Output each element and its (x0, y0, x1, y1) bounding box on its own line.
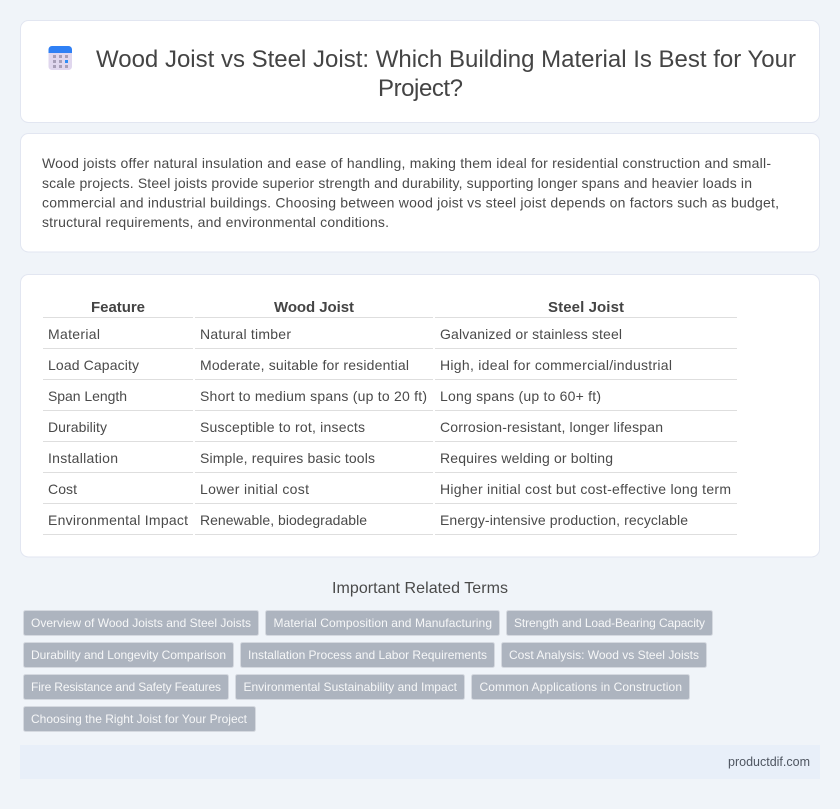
tag: Strength and Load-Bearing Capacity (514, 616, 705, 630)
table header row: Wood Joist (274, 299, 354, 316)
table row: material: Material (48, 326, 100, 342)
table row: installation: Simple, requires basic tools (200, 450, 375, 466)
comparison table (43, 299, 737, 534)
tag (24, 610, 258, 636)
tag: Overview of Wood Joists and Steel Joists (31, 616, 251, 630)
text block: description: commercial and industrial buildings. Choosing between wood joist vs steel joist depends on factors such as budget, (42, 194, 779, 210)
table row: material: Galvanized or stainless steel (440, 326, 622, 342)
text block: description: Wood joists offer natural insulation and ease of handling, making them ideal for residential construction and small- (42, 155, 771, 171)
tag (266, 610, 500, 636)
text block: description: structural requirements, and environmental conditions. (42, 214, 389, 230)
table header row: Feature (91, 299, 145, 316)
tag: Fire Resistance and Safety Features (31, 680, 221, 694)
table row: environmental impact: Energy-intensive production, recyclable (440, 512, 688, 528)
table row: environmental impact: Renewable, biodegradable (200, 512, 367, 528)
table row: installation: Installation (48, 450, 118, 466)
tag: Cost Analysis: Wood vs Steel Joists (509, 648, 699, 662)
table row: cost (48, 481, 731, 497)
table row: span length: Long spans (up to 60+ ft) (440, 388, 601, 404)
table row: span length (48, 388, 601, 404)
footer bar (20, 745, 820, 779)
text block: description: scale projects. Steel joists provide superior strength and durability, supporting longer spans and heavier loads in (42, 175, 752, 191)
table row: load capacity: Load Capacity (48, 357, 139, 373)
heading: page title: Project? (378, 75, 463, 102)
table row: material (48, 326, 622, 342)
table row: durability: Corrosion-resistant, longer lifespan (440, 419, 663, 435)
table row: durability (48, 419, 663, 435)
table row: durability: Susceptible to rot, insects (200, 419, 365, 435)
tag (236, 674, 464, 700)
tag (24, 642, 234, 668)
panel: comparison table card (20, 274, 820, 557)
tag: Durability and Longevity Comparison (31, 648, 226, 662)
panel: title card (20, 20, 820, 122)
heading: page title: Wood Joist vs Steel Joist: Which Building Material Is Best for Your (96, 46, 796, 73)
tag: Installation Process and Labor Requirements (248, 648, 487, 662)
table row: material: Natural timber (200, 326, 291, 342)
table row: cost: Higher initial cost but cost-effective long term (440, 481, 731, 497)
heading: important related terms: Important Related Terms (332, 580, 508, 597)
tag (240, 642, 494, 668)
table row: span length: Span Length (48, 388, 127, 404)
table row: durability: Durability (48, 419, 107, 435)
tag: Material Composition and Manufacturing (274, 616, 492, 630)
panel: related term tags (24, 610, 712, 732)
tag (472, 674, 690, 700)
table row: load capacity: High, ideal for commercial/industrial (440, 357, 672, 373)
table row: cost: Cost (48, 481, 77, 497)
table row: environmental impact: Environmental Impact (48, 512, 188, 528)
tag (24, 706, 256, 732)
tag: Choosing the Right Joist for Your Project (31, 712, 248, 726)
table row: cost: Lower initial cost (200, 481, 309, 497)
tag (506, 610, 712, 636)
table header row: Steel Joist (548, 299, 624, 316)
table row: span length: Short to medium spans (up to 20 ft) (200, 388, 427, 404)
heading: page title (96, 46, 796, 102)
footer source text: productdif.com (728, 755, 810, 769)
table row: load capacity (48, 357, 672, 373)
table header row (91, 299, 624, 316)
tag (502, 642, 706, 668)
tag (24, 674, 228, 700)
table row: installation (48, 450, 613, 466)
text block: description (42, 155, 779, 230)
tag: Environmental Sustainability and Impact (244, 680, 458, 694)
icon: calendar (48, 46, 72, 70)
table row: installation: Requires welding or bolting (440, 450, 613, 466)
tag: Common Applications in Construction (480, 680, 682, 694)
table row: environmental impact (48, 512, 688, 528)
table row: load capacity: Moderate, suitable for residential (200, 357, 409, 373)
panel: description card (20, 134, 820, 252)
